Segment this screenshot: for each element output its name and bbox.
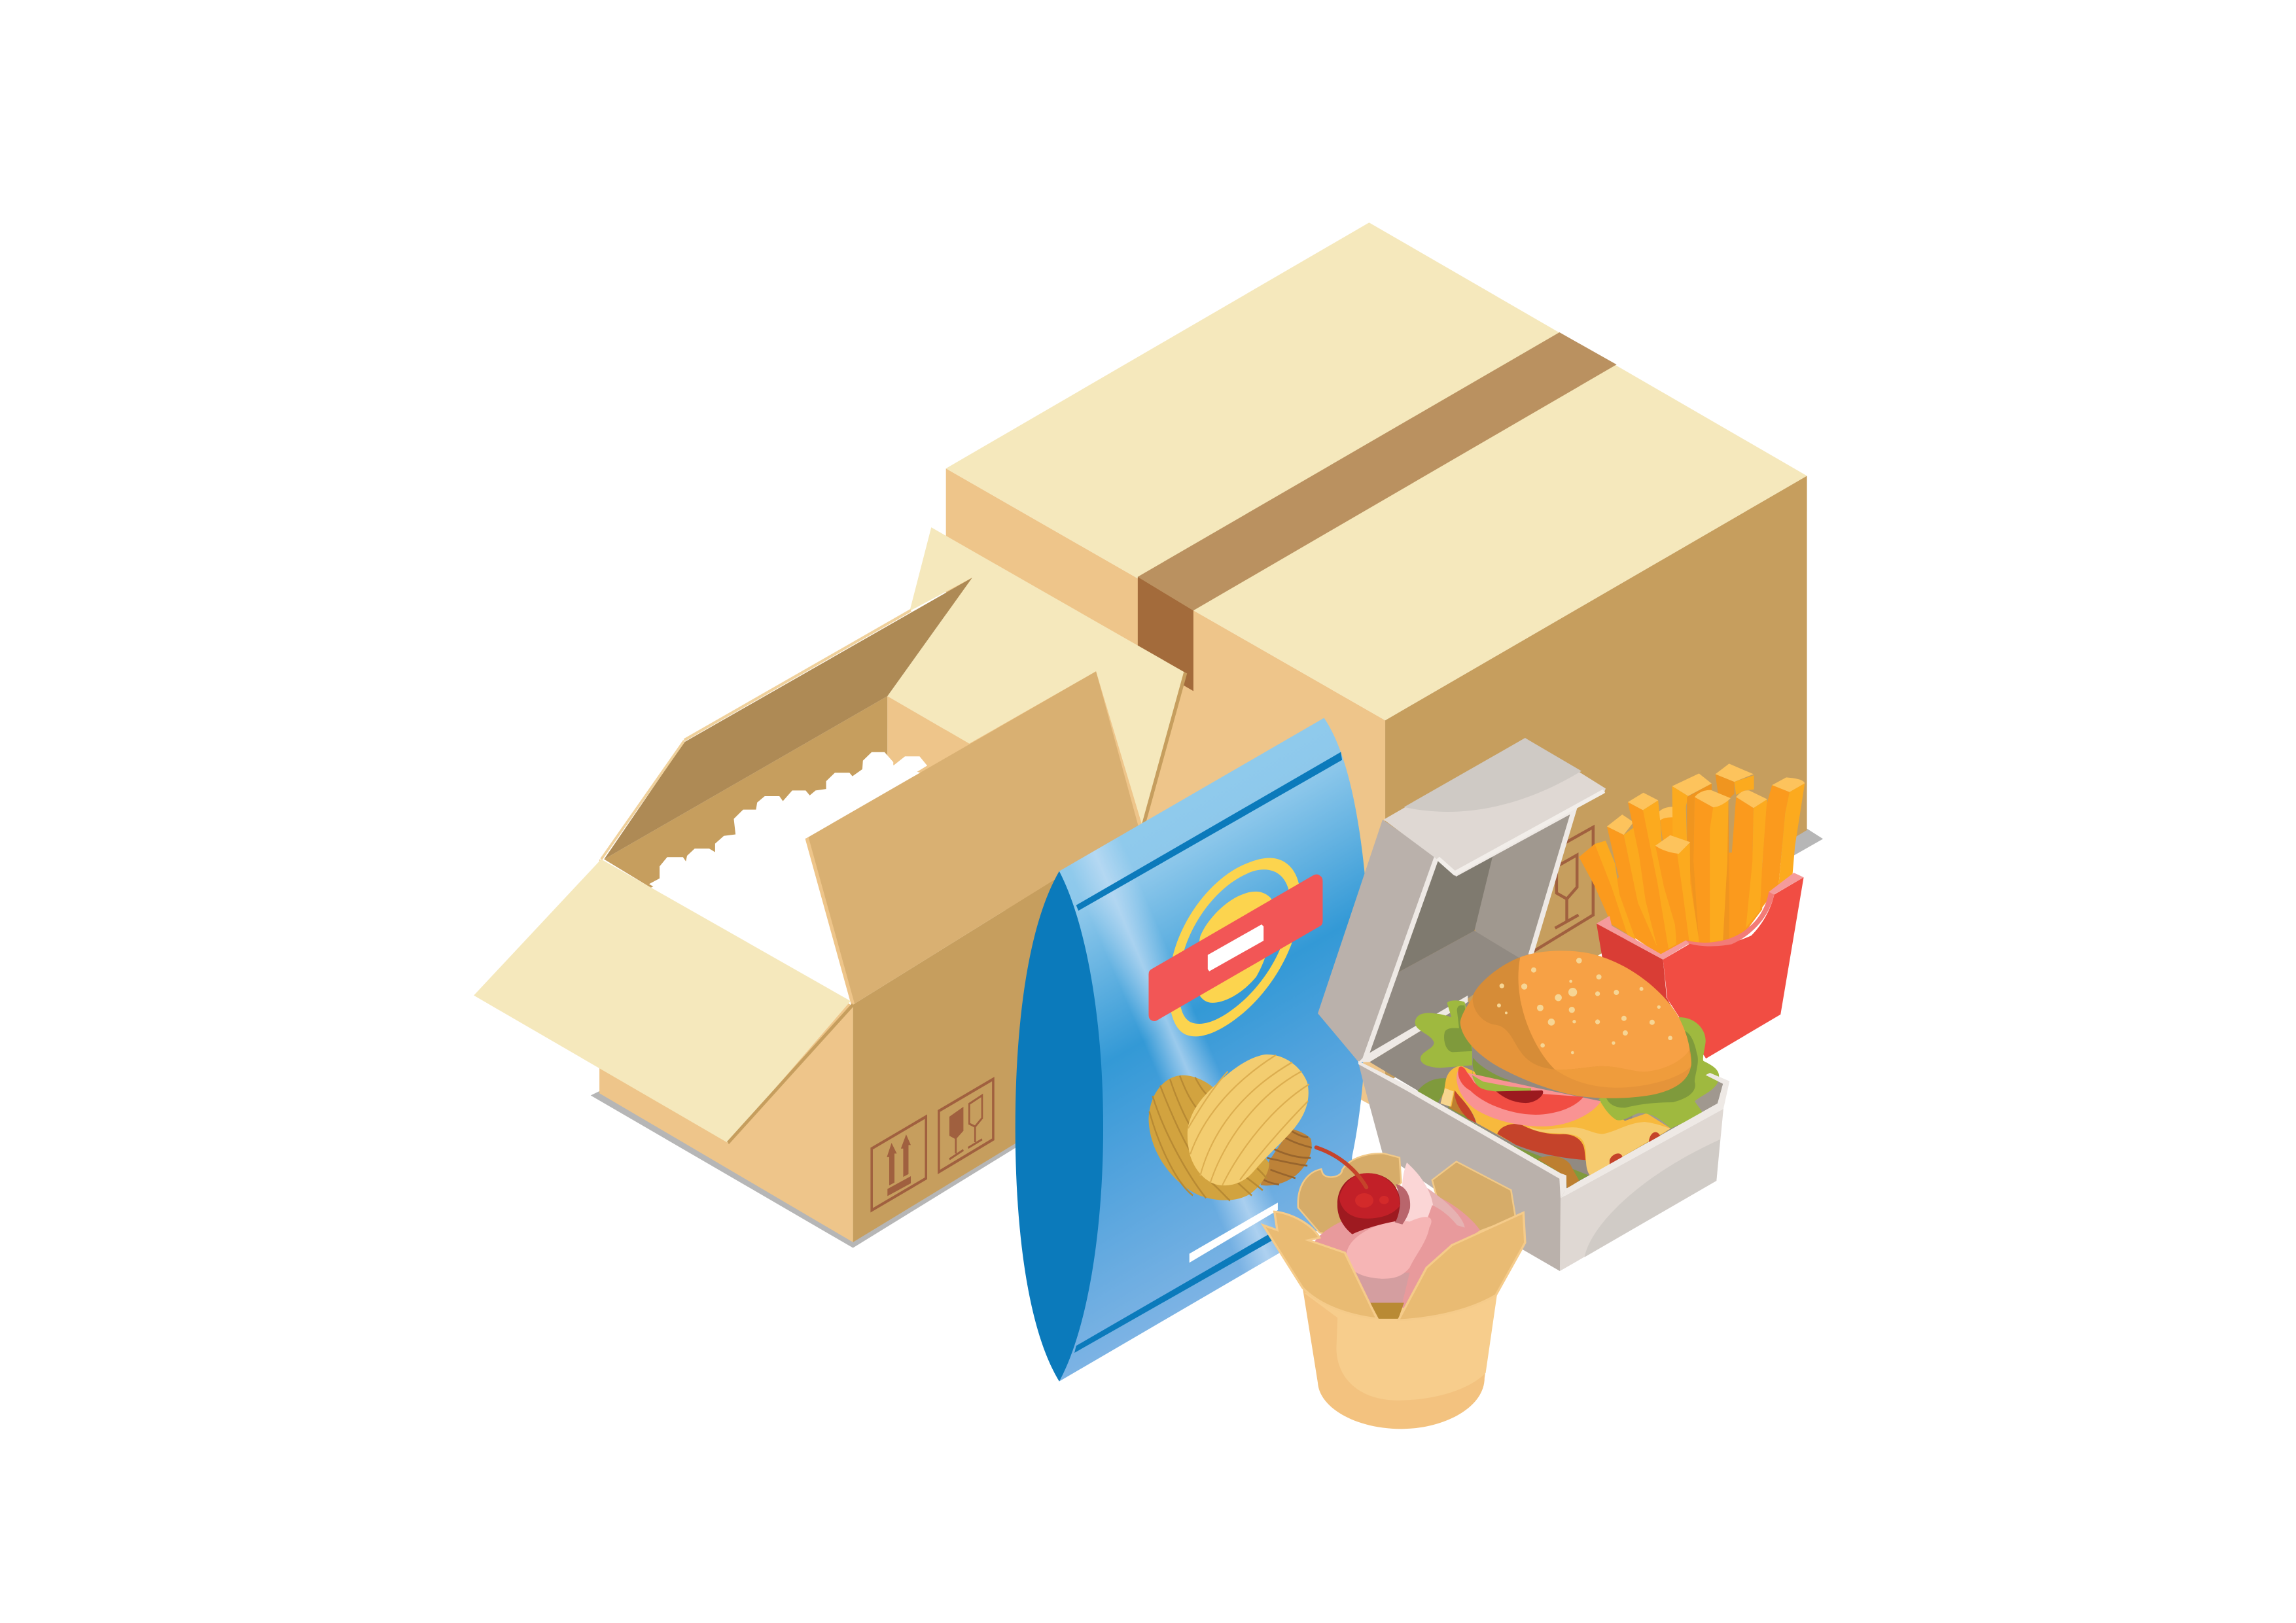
- icon: this way up arrows: [872, 1117, 926, 1210]
- cherry body: [1339, 1173, 1400, 1219]
- bag logo red banner: [1148, 875, 1322, 1021]
- bag white bar: [1190, 1202, 1278, 1263]
- front chip: [1188, 1055, 1309, 1185]
- bag side seam: [1016, 871, 1103, 1382]
- fry D: [1672, 773, 1712, 940]
- bag logo ring: [1169, 858, 1300, 1036]
- tray right face shade: [1585, 1140, 1720, 1257]
- lettuce under bun: [1473, 1058, 1510, 1083]
- box lid top: [1384, 738, 1606, 875]
- tape on top: [1138, 332, 1617, 610]
- box lid inner lower: [1364, 931, 1523, 1056]
- fries box left rim: [1597, 916, 1690, 960]
- back fry cap: [1659, 807, 1673, 820]
- burger bun rim: [1555, 1051, 1691, 1088]
- tape on front: [1138, 577, 1193, 691]
- box lid left panel: [1318, 820, 1437, 1062]
- burger brown patty: [1538, 1156, 1579, 1189]
- burger green base: [1448, 1088, 1589, 1189]
- burger bun shadow: [1473, 957, 1603, 1070]
- cup front parts: [1263, 1212, 1525, 1320]
- large box top face: [946, 222, 1807, 720]
- cream right swirl: [1413, 1205, 1465, 1287]
- front left flap edge: [728, 1005, 853, 1143]
- takeaway tray and burger: [1358, 951, 1729, 1271]
- cream shade: [1426, 1187, 1465, 1228]
- dessert cup: [1263, 1147, 1525, 1429]
- sauce spots: [1610, 1132, 1661, 1164]
- burger: [1415, 951, 1719, 1189]
- back flap edge: [1143, 672, 1186, 828]
- bag panel group: [1016, 718, 1364, 1382]
- fry C: [1628, 793, 1676, 950]
- fries backing: [1608, 852, 1762, 956]
- small box right face: [853, 828, 1139, 1242]
- cup back right flap: [1432, 1162, 1515, 1243]
- bag bottom stripe: [1074, 1232, 1275, 1353]
- front right flap: [807, 671, 1139, 1005]
- large box right face: [1385, 476, 1807, 1083]
- bag front panel: [1059, 718, 1364, 1382]
- fries box left face: [1597, 924, 1680, 1021]
- bag top stripe: [1076, 752, 1342, 911]
- cherry stem: [1316, 1147, 1366, 1187]
- chip bag: [1016, 718, 1364, 1382]
- small leaf: [1415, 1078, 1446, 1108]
- left chip: [1148, 1075, 1269, 1200]
- cherry highlight: [1355, 1193, 1373, 1208]
- fries box right face: [1663, 877, 1804, 1058]
- box lid inner dark: [1398, 854, 1493, 972]
- takeaway box lid: [1318, 738, 1606, 1062]
- fry E: [1655, 835, 1699, 945]
- front chip ridges: [1188, 1055, 1309, 1185]
- cup body: [1303, 1287, 1497, 1429]
- burger brown left: [1449, 1091, 1472, 1117]
- onion ring: [1457, 1071, 1601, 1126]
- bag shine: [1059, 718, 1364, 1382]
- white packing filler: [649, 752, 927, 1005]
- sauce left: [1455, 1091, 1476, 1123]
- bag logo center: [1197, 892, 1273, 1003]
- fry G: [1729, 790, 1767, 939]
- fry B: [1607, 814, 1657, 945]
- fries box curved rim: [1686, 892, 1775, 947]
- box lid inner back: [1455, 811, 1573, 968]
- cup center fold: [1370, 1302, 1404, 1319]
- lettuce left: [1415, 1000, 1531, 1092]
- french fries in red box: [1579, 763, 1805, 1058]
- sauce main: [1497, 1124, 1585, 1160]
- large box left face: [946, 468, 1385, 1113]
- cup highlight: [1303, 1293, 1497, 1401]
- tray interior right: [1625, 1045, 1723, 1153]
- lettuce right: [1598, 1017, 1719, 1128]
- cream front blob: [1347, 1217, 1432, 1279]
- inner right wall: [887, 696, 969, 774]
- tray right rim: [1561, 1073, 1729, 1198]
- large cardboard box: [946, 222, 1823, 1113]
- tray left face: [1358, 1062, 1566, 1271]
- fragile icon on large box: [1533, 827, 1593, 952]
- tray left rim: [1358, 1061, 1566, 1198]
- cheese left strip: [1441, 1088, 1454, 1107]
- lettuce strip over tomato: [1472, 1075, 1531, 1092]
- tray right face: [1560, 1109, 1723, 1271]
- front left flap: [474, 859, 851, 1143]
- tray interior: [1369, 1002, 1723, 1189]
- inner left wall: [604, 696, 887, 888]
- cup front left flap: [1263, 1212, 1377, 1319]
- cream lower: [1356, 1273, 1409, 1308]
- sesame seeds: [1497, 958, 1672, 1054]
- front right flap edge: [807, 838, 853, 1005]
- tomato: [1458, 1066, 1583, 1115]
- box lid rim: [1364, 810, 1574, 1060]
- cherry dark side: [1337, 1173, 1400, 1234]
- cherry spot: [1379, 1196, 1389, 1204]
- cherry shadow: [1395, 1184, 1410, 1225]
- small box shadow: [591, 1066, 1139, 1248]
- back fry: [1659, 807, 1673, 850]
- brown chip ridges: [1263, 1131, 1312, 1185]
- box lid lower edge: [1438, 791, 1604, 873]
- cup lower parts: [1298, 1153, 1515, 1429]
- bag logo white label: [1208, 924, 1263, 971]
- cheese light layer: [1529, 1122, 1670, 1176]
- left chip ridges: [1149, 1075, 1267, 1200]
- icon: fragile glasses: [939, 1079, 993, 1172]
- lettuce right shade: [1606, 1030, 1698, 1108]
- small box left face: [599, 859, 853, 1242]
- fry A: [1579, 841, 1636, 940]
- cherry: [1316, 1147, 1410, 1234]
- brown chip: [1260, 1128, 1312, 1185]
- tomato dark: [1496, 1091, 1543, 1103]
- inner dark flap: [604, 578, 972, 859]
- cream peak: [1401, 1162, 1434, 1237]
- cup back left flap: [1298, 1153, 1401, 1238]
- fries box right rim: [1769, 873, 1804, 894]
- cheese layer: [1441, 1066, 1670, 1176]
- large box shadow: [1713, 829, 1823, 893]
- fry I: [1760, 777, 1805, 911]
- cream base: [1314, 1187, 1480, 1308]
- tray back rim: [1358, 996, 1468, 1062]
- burger bun base: [1460, 951, 1691, 1098]
- cup front right flap: [1398, 1213, 1525, 1320]
- logo and chips on bag: [1148, 858, 1322, 1200]
- back flap: [887, 527, 1186, 828]
- fry H: [1716, 763, 1754, 942]
- fry F: [1693, 790, 1731, 943]
- box lid top shade: [1404, 738, 1581, 812]
- small open box: [474, 527, 1186, 1248]
- burger bun top: [1518, 951, 1689, 1072]
- dark flap edges: [601, 610, 911, 859]
- lettuce left shade: [1444, 1005, 1472, 1052]
